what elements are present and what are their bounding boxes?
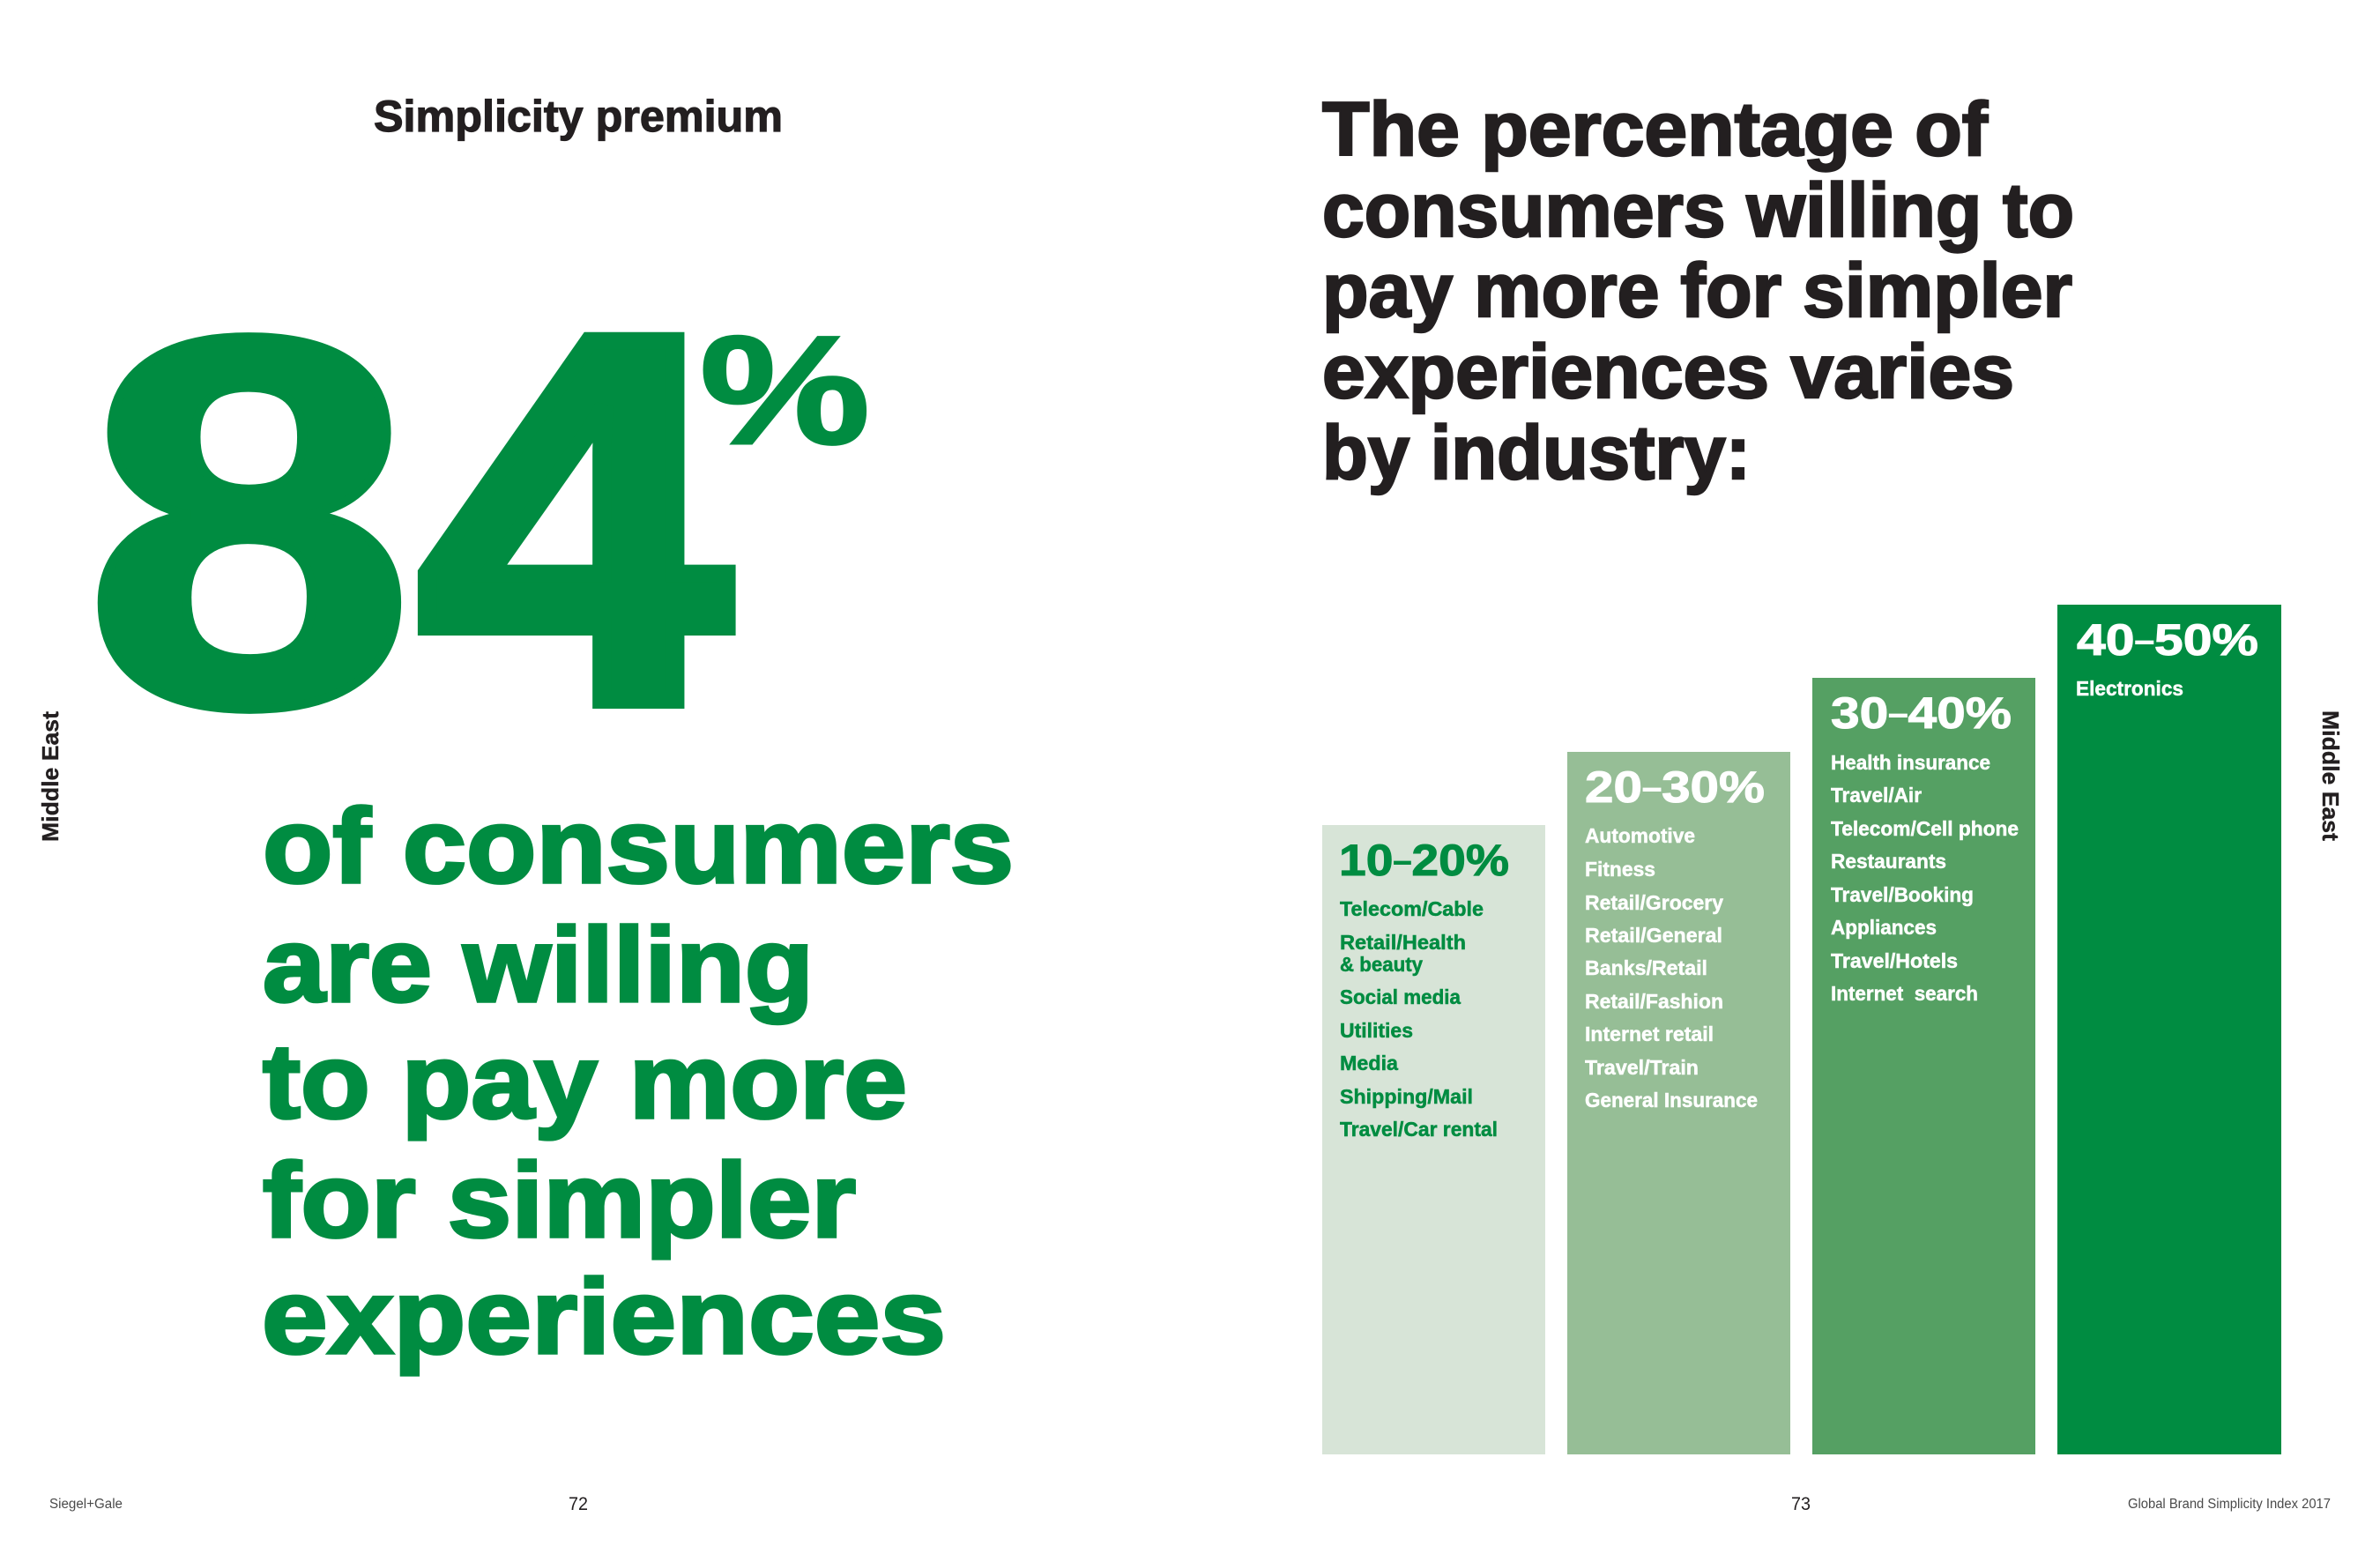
bar: 30-40%: Health insurance [1831,751,1990,774]
left page title: Simplicity premium [374,92,783,141]
right side label: Middle East: Middle East [2317,710,2344,841]
right page headline: by industry: [1322,411,1751,495]
bar: 30-40%: 40% [1908,688,2012,738]
bar: 30-40%: Telecom/Cell phone [1831,817,2019,840]
bar: 20-30%: Retail/General [1585,924,1722,947]
bar: 20-30% [1567,752,1790,1454]
statement text: of consumers [263,787,1014,905]
bar: 20-30%: Automotive [1585,824,1695,847]
bar: 20-30%: Internet retail [1585,1022,1714,1045]
right page headline: pay more for simpler [1322,249,2072,333]
left side label: Middle East: Middle East [37,711,63,842]
bar: 20-30%: General Insurance [1585,1089,1758,1112]
bar: 30-40%: Restaurants [1831,850,1946,873]
bar: 30-40% [1812,678,2035,1454]
bar: 10-20%: 10 [1339,836,1388,885]
bar: 10-20% [1322,825,1545,1454]
bar: 10-20%: Telecom/Cable [1340,897,1484,920]
bar: 10-20%: Retail/Health [1340,931,1466,954]
page number 73: 73 [1791,1494,1811,1514]
bar: 20-30%: Travel/Train [1585,1056,1699,1079]
bar: 20-30%: – [1642,771,1662,805]
right page headline: experiences varies [1322,330,2014,414]
right page headline: consumers willing to [1322,168,2074,253]
statement text [262,787,1014,1376]
bar: 10-20%: Social media [1340,985,1461,1008]
page number 72: 72 [569,1494,588,1514]
bar: 40-50%: 40 [2077,615,2126,665]
bar: 20-30%: 20 [1585,762,1634,812]
bar: 30-40%: Internet search [1831,982,1978,1005]
footer right: report name: Global Brand Simplicity Index 2017 [2128,1497,2331,1512]
statement text: to pay more [263,1022,907,1141]
bar: 20-30%: Fitness [1585,858,1655,881]
bar: 10-20%: Media [1340,1052,1399,1074]
bar: 10-20%: – [1393,844,1411,878]
bar: 10-20%: Shipping/Mail [1340,1085,1473,1108]
bar: 30-40%: Appliances [1831,916,1937,939]
big statistic 84%: 8 [84,227,414,816]
bar: 40-50%: 50% [2154,615,2258,665]
bar: 30-40%: Travel/Booking [1831,883,1974,906]
bar: 30-40%: Travel/Air [1831,784,1922,807]
bar: 20-30%: 30% [1662,762,1765,812]
statement text: are willing [263,906,814,1024]
bar: 40-50%: Electronics [2076,677,2183,700]
bar: 20-30%: Retail/Fashion [1585,990,1723,1013]
right page headline [1322,87,2074,495]
right page headline: The percentage of [1322,87,1988,172]
statement text: experiences [262,1258,946,1376]
bar: 30-40%: Travel/Hotels [1831,949,1958,972]
footer left: publisher: Siegel+Gale [49,1497,123,1512]
big statistic 84%: 4 [419,227,733,811]
bar: 20-30%: Retail/Grocery [1585,891,1723,914]
bar: 10-20%: 20% [1411,836,1509,885]
statement text: for simpler [263,1141,856,1260]
bar: 10-20%: Travel/Car rental [1340,1118,1498,1141]
bar: 40-50%: – [2135,624,2154,658]
bar: 30-40%: – [1888,697,1908,731]
bar: 10-20%: Utilities [1340,1019,1413,1042]
big statistic 84% [84,227,870,816]
big statistic 84%: % [700,304,870,476]
bar: 10-20%: & beauty [1340,953,1423,976]
bar: 40-50% [2057,605,2281,1454]
bar: 30-40%: 30 [1831,688,1880,738]
bar: 20-30%: Banks/Retail [1585,956,1707,979]
